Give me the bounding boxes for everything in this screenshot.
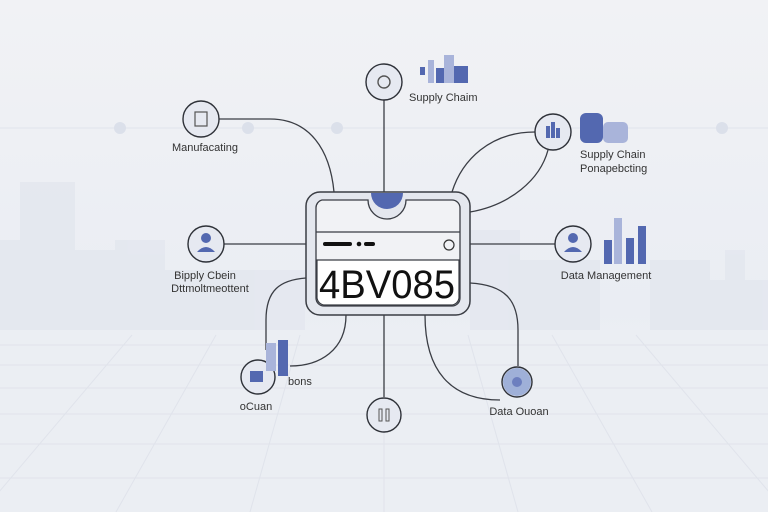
skyline: [0, 182, 768, 342]
labels: Bipply Cbein: [174, 270, 236, 282]
charts: [266, 55, 646, 376]
labels: [171, 92, 651, 418]
central device: [306, 192, 470, 315]
labels: bons: [288, 376, 312, 388]
icons: [195, 76, 582, 421]
labels: Ponapebcting: [580, 163, 647, 175]
labels: Manufacating: [172, 142, 238, 154]
labels: Supply Chaim: [409, 92, 477, 104]
labels: Data Management: [561, 270, 651, 282]
labels: Dttmoltmeottent: [171, 283, 249, 295]
connector lines: [219, 100, 555, 400]
labels: oCuan: [240, 401, 272, 413]
labels: Supply Chain: [580, 149, 645, 161]
central device: 4BV085: [319, 263, 455, 307]
nodes: [183, 64, 591, 432]
labels: Data Ouoan: [489, 406, 549, 418]
